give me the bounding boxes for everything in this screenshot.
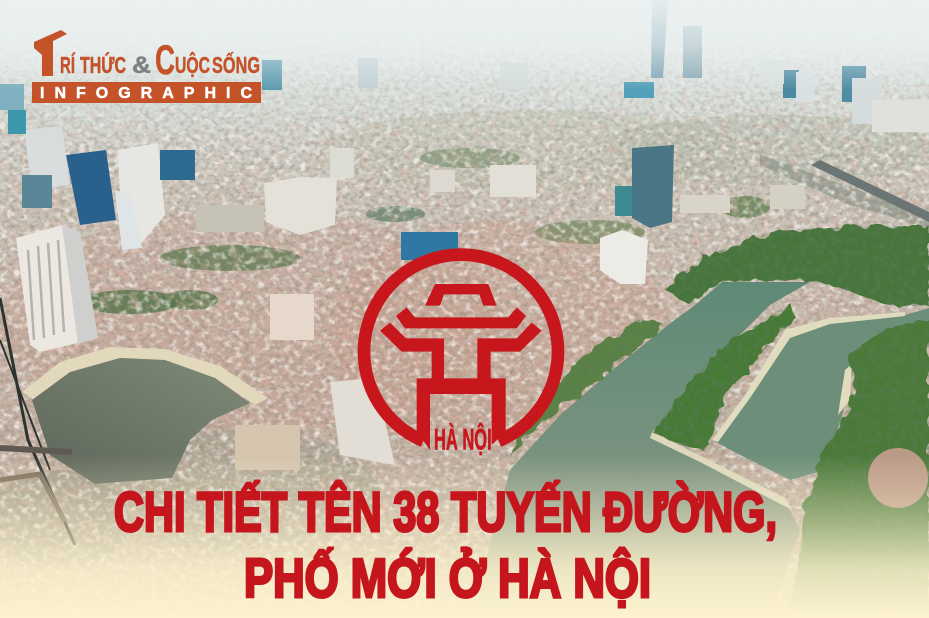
parks and trees <box>510 226 929 618</box>
Hanoi emblem <box>364 255 558 456</box>
high-rise buildings <box>0 0 929 470</box>
crane at left edge <box>0 298 75 545</box>
left pond <box>22 347 268 484</box>
top haze <box>0 0 929 90</box>
logo wordmark: C <box>155 36 175 83</box>
emblem label: HÀ NỘI <box>434 422 492 456</box>
emblem gate <box>380 284 542 450</box>
main lake <box>470 282 929 618</box>
logo wordmark: & <box>132 52 151 79</box>
logo: Tri Thuc & Cuoc Song Infographic <box>32 30 261 103</box>
logo wordmark <box>60 36 260 83</box>
title line 2: PHỐ MỚI Ở HÀ NỘI <box>244 547 651 609</box>
logo infographic band <box>32 82 261 103</box>
title <box>114 480 777 609</box>
logo wordmark: SỐNG <box>212 51 260 78</box>
round pavilion roof in the park <box>868 448 928 508</box>
logo: Tri Thuc & Cuoc Song Infographic: INFOGRAPHIC <box>40 85 252 102</box>
logo wordmark: THỨC <box>80 51 126 78</box>
bottom cream fade <box>0 455 929 618</box>
emblem ring <box>364 255 558 441</box>
city block colour patches <box>0 110 929 570</box>
logo wordmark: RÍ <box>60 51 75 78</box>
logo wordmark: UỘC <box>175 51 210 78</box>
foliage texture <box>510 226 929 562</box>
logo T mark <box>34 30 67 76</box>
